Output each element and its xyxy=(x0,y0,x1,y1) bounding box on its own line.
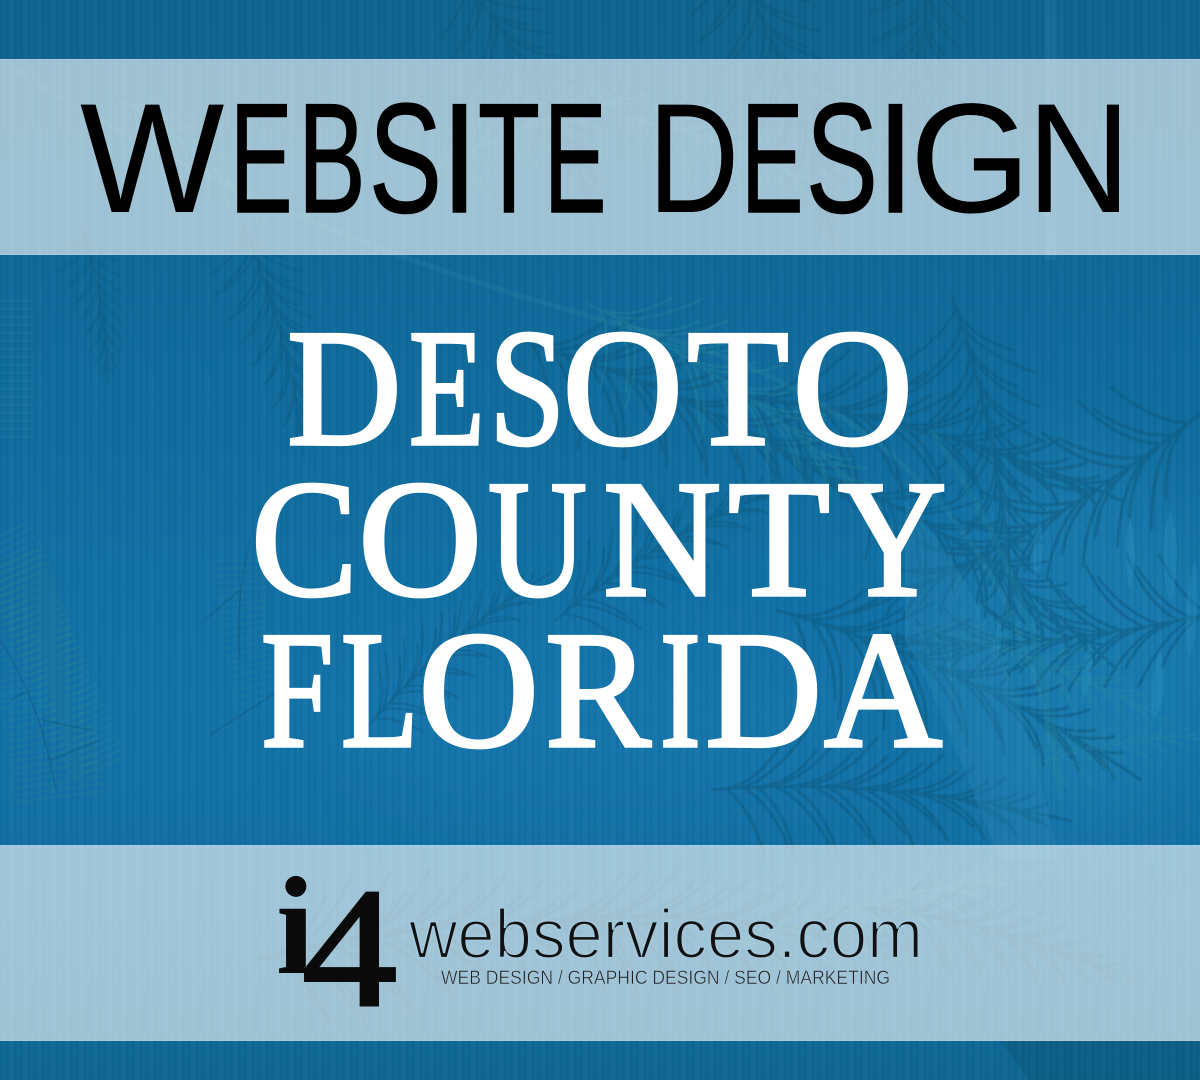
heading: DeSoto County Florida: O xyxy=(562,296,683,481)
heading: website design: D xyxy=(648,72,739,246)
logo mark: i4 xyxy=(276,849,397,1043)
heading: DeSoto County Florida: O xyxy=(418,598,539,783)
heading: website design: N xyxy=(1027,72,1131,246)
heading: website design: S xyxy=(369,72,442,246)
heading: website design: E xyxy=(544,72,606,246)
heading: DeSoto County Florida: F xyxy=(261,598,334,783)
heading: DeSoto County Florida: C xyxy=(251,447,358,632)
heading: website design: S xyxy=(806,72,878,246)
heading: website design xyxy=(80,72,1131,246)
logo: i4 webservices.com xyxy=(276,860,923,1020)
sky slivers between palm leaves xyxy=(952,510,1198,720)
logo tagline: WEB DESIGN / GRAPHIC DESIGN / SEO / MARKETING xyxy=(441,968,890,989)
heading: DeSoto County Florida: I xyxy=(660,598,700,783)
heading: website design: I xyxy=(441,72,478,246)
heading: website design: E xyxy=(741,72,803,246)
heading: DeSoto County Florida: T xyxy=(687,296,789,481)
heading: website design: E xyxy=(230,72,292,246)
heading: DeSoto County Florida: A xyxy=(824,598,942,783)
bottom band xyxy=(0,845,1200,1041)
right lighter glow xyxy=(320,0,1200,840)
heading: DeSoto County Florida: N xyxy=(603,447,721,632)
heading: DeSoto County Florida: D xyxy=(705,598,822,783)
heading: DeSoto County Florida: S xyxy=(489,296,565,481)
heading: website design: T xyxy=(478,72,540,246)
heading: website design: W xyxy=(80,72,224,246)
heading: DeSoto County Florida: O xyxy=(792,296,913,481)
heading: DeSoto County Florida: L xyxy=(340,598,418,783)
heading: website design: I xyxy=(877,72,914,246)
heading: DeSoto County Florida: O xyxy=(358,447,482,632)
wispy trees at left xyxy=(0,300,260,800)
heading: DeSoto County Florida: E xyxy=(408,296,484,481)
heading: DeSoto County Florida: R xyxy=(545,598,651,783)
heading: DeSoto County Florida: Y xyxy=(838,447,947,632)
heading: website design: B xyxy=(298,72,365,246)
heading: DeSoto County Florida xyxy=(251,296,947,783)
top band xyxy=(0,59,1200,255)
heading: DeSoto County Florida: D xyxy=(287,296,402,481)
heading: DeSoto County Florida: U xyxy=(488,447,587,632)
heading: website design: G xyxy=(910,72,1031,246)
logo wordmark: webservices.com xyxy=(408,895,923,973)
heading: DeSoto County Florida: T xyxy=(728,447,830,632)
